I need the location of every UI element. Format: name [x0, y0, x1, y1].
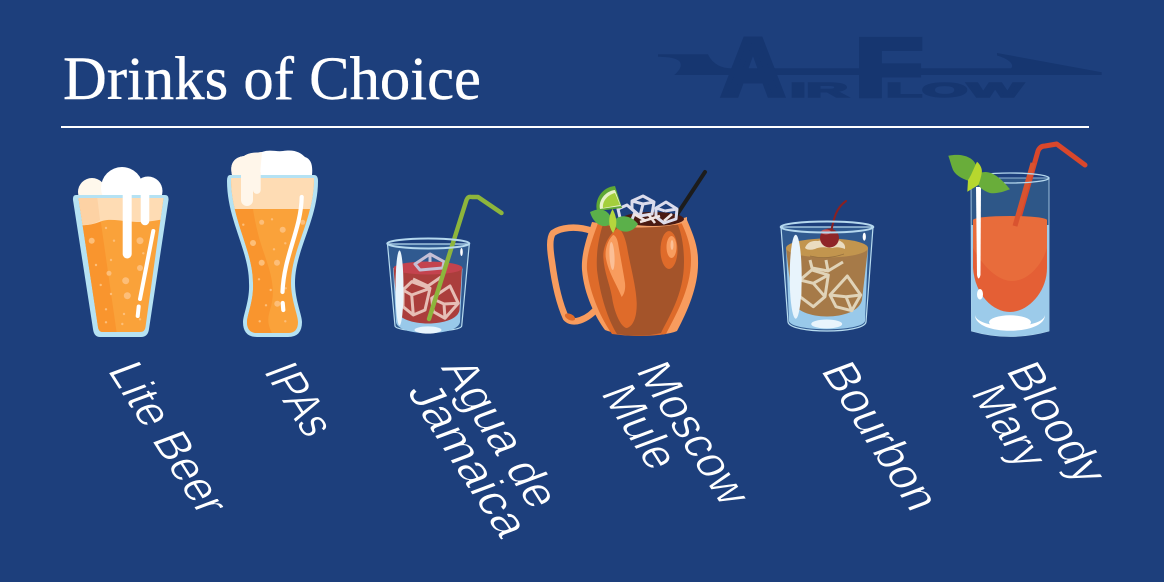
- icon: bourbon glass: [781, 201, 873, 331]
- title: Drinks of Choice: [63, 46, 481, 113]
- infographic canvas: [61, 36, 1102, 540]
- icon: lite beer glass: [70, 167, 170, 337]
- label: Bloody Mary: [960, 355, 1119, 490]
- label: Bloody Mary: Bloody: [995, 355, 1119, 490]
- label: Agua de Jamaica: Agua de: [430, 352, 571, 514]
- logo: AirFlow watermark: A: [722, 22, 784, 114]
- label: Bourbon: Bourbon: [810, 355, 951, 517]
- logo: AirFlow watermark: [658, 22, 1102, 114]
- logo: AirFlow watermark: F: [855, 22, 923, 114]
- label: Moscow Mule: Mule: [590, 378, 690, 476]
- label: Bloody Mary: Mary: [960, 378, 1059, 474]
- logo: AirFlow watermark: IR: [790, 80, 850, 102]
- label: Lite Beer: Lite Beer: [97, 355, 240, 520]
- label: Agua de Jamaica: Jamaica: [396, 376, 541, 544]
- icon: bloody mary glass: [948, 144, 1085, 340]
- icon: moscow mule copper mug: [550, 172, 705, 336]
- label: Agua de Jamaica: [396, 352, 571, 544]
- label: IPAs: IPAs: [253, 356, 346, 443]
- icon: agua de jamaica glass: [387, 197, 502, 334]
- label: Moscow Mule: [590, 355, 762, 511]
- logo: AirFlow watermark: LOW: [886, 80, 1023, 102]
- icon: IPA glass: [225, 150, 320, 337]
- label: Moscow Mule: Moscow: [625, 355, 762, 511]
